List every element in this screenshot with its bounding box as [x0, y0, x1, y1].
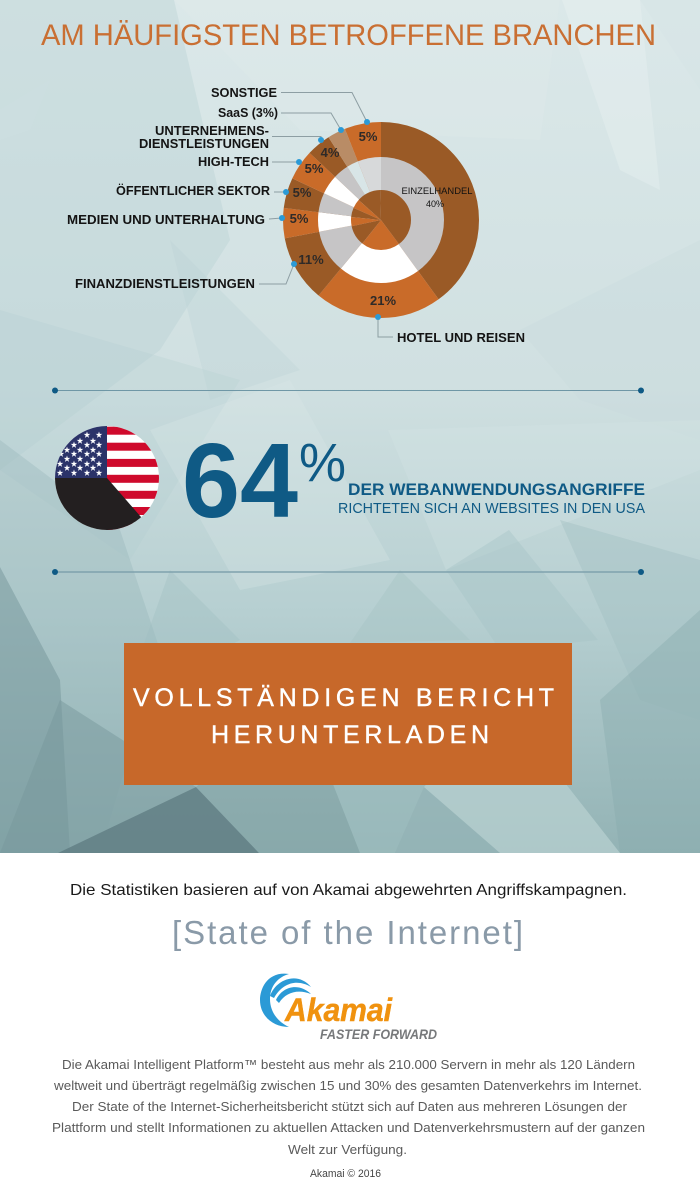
button: download report: VOLLSTÄNDIGEN BERICHT: [133, 684, 554, 712]
about paragraph: Welt zur Verfügung.: [288, 1142, 407, 1157]
leader lines and category labels: SaaS (3%): [218, 106, 278, 120]
value labels: 4%: [321, 145, 340, 160]
title: AM HÄUFIGSTEN BETROFFENE BRANCHEN: [41, 19, 656, 52]
donut chart: affected industries: [290, 129, 472, 308]
button: download report: [124, 643, 572, 785]
stat description: [338, 480, 645, 517]
about paragraph: Plattform und stellt Informationen zu aktuellen Attacken und Datenverkehrsmustern auf der ganzen: [52, 1120, 645, 1135]
logo: Akamai: FASTER FORWARD: [320, 1026, 437, 1042]
logo: Akamai: Akamai: [284, 992, 393, 1028]
background: faceted teal panel: [0, 0, 700, 853]
about paragraph: Der State of the Internet-Sicherheitsbericht stützt sich auf Daten aus mehreren Lösungen der: [72, 1099, 628, 1114]
leader lines and category labels: SONSTIGE: [211, 86, 277, 100]
about paragraph: weltweit und überträgt regelmäßig zwischen 15 und 30% des gesamten Datenverkehrs im Internet.: [53, 1078, 642, 1093]
leader lines and category labels: [67, 86, 525, 345]
value labels: 5%: [290, 211, 309, 226]
top divider: [52, 388, 644, 394]
leader lines and category labels: HOTEL UND REISEN: [397, 331, 525, 345]
middle ring: [350, 188, 412, 252]
leader lines and category labels: FINANZDIENSTLEISTUNGEN: [75, 277, 255, 291]
value labels: 5%: [305, 161, 324, 176]
about paragraph: [52, 1057, 645, 1157]
leader lines and category labels: UNTERNEHMENS-: [155, 124, 269, 138]
value labels: 5%: [293, 185, 312, 200]
report name: [State of the Internet]: [172, 914, 523, 951]
footer panel: [0, 853, 700, 1200]
big stat 64 percent: 64: [182, 422, 298, 540]
leader lines and category labels: MEDIEN UND UNTERHALTUNG: [67, 213, 265, 227]
outer ring: [332, 171, 430, 269]
leader lines and category labels: DIENSTLEISTUNGEN: [139, 137, 269, 151]
stat description: DER WEBANWENDUNGSANGRIFFE: [348, 480, 645, 499]
big stat 64 percent: %: [299, 433, 346, 493]
retail label: [402, 186, 472, 209]
stat description: RICHTETEN SICH AN WEBSITES IN DEN USA: [338, 500, 645, 517]
value labels: 5%: [359, 129, 378, 144]
retail label: EINZELHANDEL: [402, 186, 472, 196]
bottom divider: [52, 569, 644, 575]
logo: Akamai: [260, 974, 437, 1042]
inner ring: [366, 205, 396, 235]
button: download report: HERUNTERLADEN: [211, 721, 489, 749]
leader lines and category labels: ÖFFENTLICHER SEKTOR: [116, 183, 270, 198]
copyright: Akamai © 2016: [310, 1168, 381, 1180]
retail label: 40%: [426, 199, 444, 209]
value labels: [290, 129, 396, 308]
value labels: 11%: [298, 252, 324, 267]
value labels: 21%: [370, 293, 396, 308]
about paragraph: Die Akamai Intelligent Platform™ besteht aus mehr als 210.000 Servern in mehr als 120 Ländern: [62, 1057, 635, 1072]
leader lines and category labels: HIGH-TECH: [198, 155, 269, 169]
icon: US flag pie 64 percent: [55, 426, 159, 530]
footer statement: Die Statistiken basieren auf von Akamai abgewehrten Angriffskampagnen.: [70, 882, 627, 899]
